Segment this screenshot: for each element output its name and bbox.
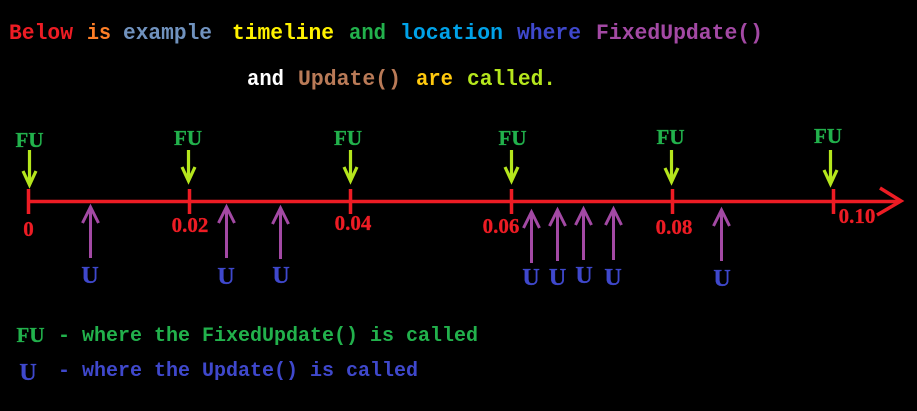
Update labels: U [604,265,622,291]
FixedUpdate labels: FU [498,126,526,150]
Update labels: U [549,265,566,291]
tick labels: 0.04 [335,211,372,235]
timeline axis [28,188,901,215]
Update labels [81,263,731,292]
title: is [87,21,111,46]
title: are [416,67,453,92]
title: FixedUpdate() [596,21,763,46]
tick labels [23,204,875,241]
tick labels: 0.06 [483,214,519,238]
Update labels: U [713,266,731,292]
title: Update() [298,67,401,92]
FixedUpdate labels: FU [174,126,202,150]
title: timeline [232,21,334,46]
Update labels: U [575,263,593,289]
legend: Update: U [19,360,37,386]
title: called. [467,67,556,92]
title: location [400,21,503,46]
FixedUpdate labels: FU [16,128,44,152]
Update labels: U [217,264,235,290]
title: and [349,21,386,46]
Update labels: U [272,263,290,289]
Update labels: U [81,263,99,289]
Update labels: U [522,265,540,291]
Update arrows [82,207,730,263]
title: example [123,21,212,46]
tick labels: 0.10 [839,204,875,228]
title [9,21,763,92]
tick labels: 0.08 [656,215,692,239]
legend: Update: - where the Update() is called [58,360,418,383]
FixedUpdate labels: FU [814,124,842,148]
title: where [517,21,581,46]
title: Below [9,21,74,46]
legend: FixedUpdate: - where the FixedUpdate() is called [58,325,478,348]
legend: FixedUpdate: FU [16,323,44,347]
tick labels: 0.02 [172,213,208,237]
title: and [247,67,284,92]
FixedUpdate labels: FU [656,125,684,149]
FixedUpdate arrows [23,150,837,185]
FixedUpdate labels [16,124,842,152]
tick labels: 0 [23,217,34,241]
FixedUpdate labels: FU [334,126,362,150]
